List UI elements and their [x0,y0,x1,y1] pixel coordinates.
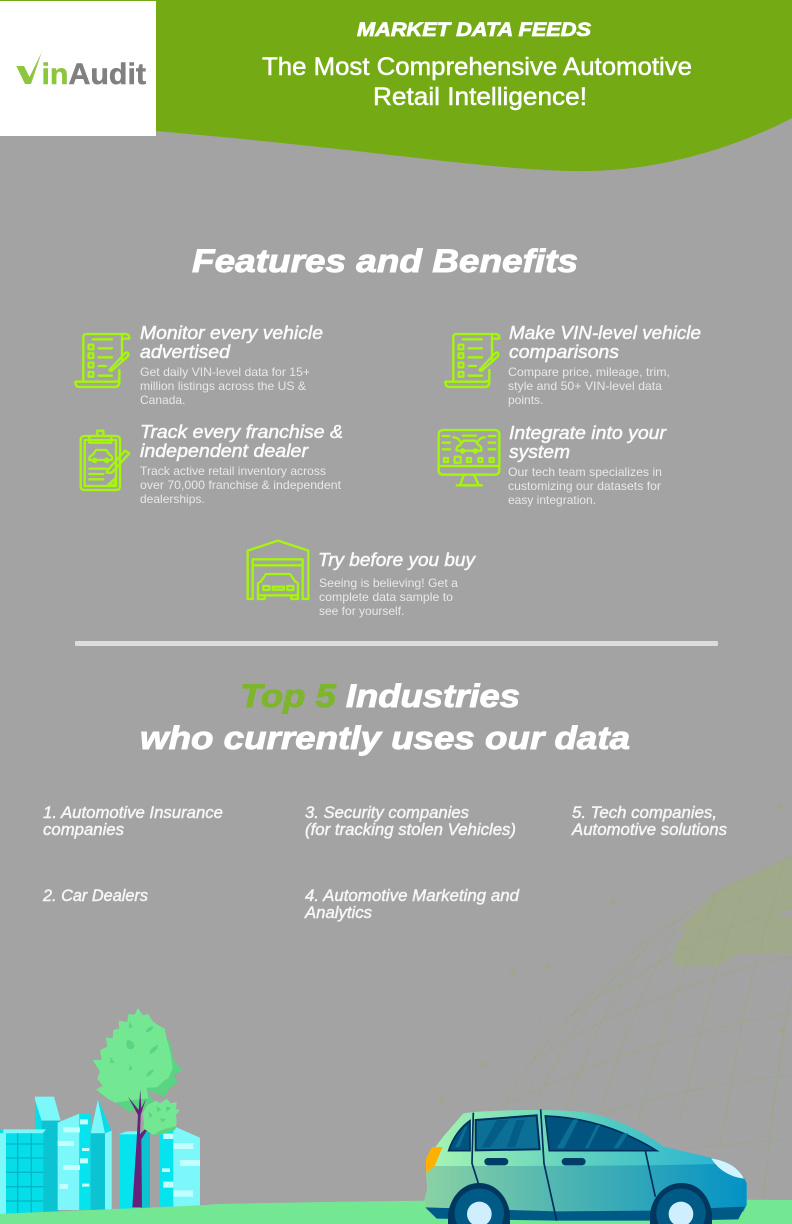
background globe [439,803,792,1200]
text: Monitor every vehicle [140,322,323,343]
tree [93,1008,182,1207]
feature: monitor every vehicle: Canada. [140,393,185,407]
logo panel [0,1,156,136]
feature: monitor every vehicle: Get daily VIN-level data for 15+ [140,365,310,379]
feature: try before you buy [248,541,477,618]
icon: clipboard with car [81,431,129,490]
text: Track every franchise & [140,421,343,442]
logo wordmark: inAudit [42,58,146,91]
feature: integrate into your system: easy integration. [508,493,596,507]
headlight [711,1158,744,1179]
feature: make VIN-level comparisons [445,322,701,407]
heading: features and benefits: Features and Benefits [192,243,578,279]
feature: try before you buy: complete data sample to [319,590,453,604]
feature: track every franchise [81,421,343,506]
buildings right [119,1131,142,1135]
feature: make VIN-level comparisons: points. [508,393,543,407]
feature: monitor every vehicle [75,322,323,407]
icon: monitor with car [439,430,499,485]
header title: The Most Comprehensive Automotive [262,53,692,81]
windows [449,1121,470,1151]
feature: monitor every vehicle: million listings across the US & [140,379,306,393]
item 1: 1. Automotive Insurance [43,804,223,822]
industry list: companies [43,821,124,839]
header title [262,53,692,111]
feature: track every franchise: dealerships. [140,492,205,506]
item 2: 2. Car Dealers [42,887,148,905]
item 3: 3. Security companies [305,804,469,822]
industry list [42,804,727,922]
feature: try before you buy: Seeing is believing! Get a [319,576,458,590]
header eyebrow: MARKET DATA FEEDS [357,19,591,41]
feature: integrate into your system: Our tech team specializes in [508,465,662,479]
door seams and handles [472,1109,655,1221]
logo check mark [16,52,42,84]
icon: garage with car [248,541,308,599]
text: Try before you buy [318,549,477,570]
feature: integrate into your system: system [509,441,570,462]
text: Integrate into your [509,422,667,443]
item 4: 4. Automotive Marketing and [305,887,520,905]
feature: integrate into your system [439,422,667,507]
feature: monitor every vehicle: advertised [140,341,231,362]
icon: document checklist [75,334,129,387]
item 5: 5. Tech companies, [572,804,717,822]
industry list: Automotive solutions [571,821,727,839]
heading: top 5 industries [140,678,630,756]
bumper sill [425,1207,745,1221]
header banner [0,0,792,171]
buildings left [35,1097,61,1133]
feature: make VIN-level comparisons: Compare price, mileage, trim, [508,365,670,379]
car body [425,1110,747,1212]
car illustration [425,1109,747,1224]
feature: track every franchise: Track active retail inventory across [140,464,326,478]
feature: make VIN-level comparisons: style and 50+ VIN-level data [508,379,662,393]
feature: integrate into your system: customizing our datasets for [508,479,661,493]
wheels [448,1183,510,1224]
industry list: Analytics [304,904,372,922]
ground [0,1200,792,1224]
feature: track every franchise: independent dealer [140,440,309,461]
industry list: (for tracking stolen Vehicles) [305,821,516,839]
feature: try before you buy: see for yourself. [319,604,404,618]
tail light [426,1147,443,1173]
text: Make VIN-level vehicle [509,322,701,343]
heading: top 5 industries: Top 5 Industries [240,678,520,714]
city illustration [0,1008,200,1215]
feature: track every franchise: over 70,000 franchise & independent [140,478,342,492]
heading: top 5 industries: who currently uses our data [140,720,630,756]
feature: make VIN-level comparisons: comparisons [509,341,619,362]
header title: Retail Intelligence! [373,83,587,111]
icon: document checklist [445,334,499,387]
